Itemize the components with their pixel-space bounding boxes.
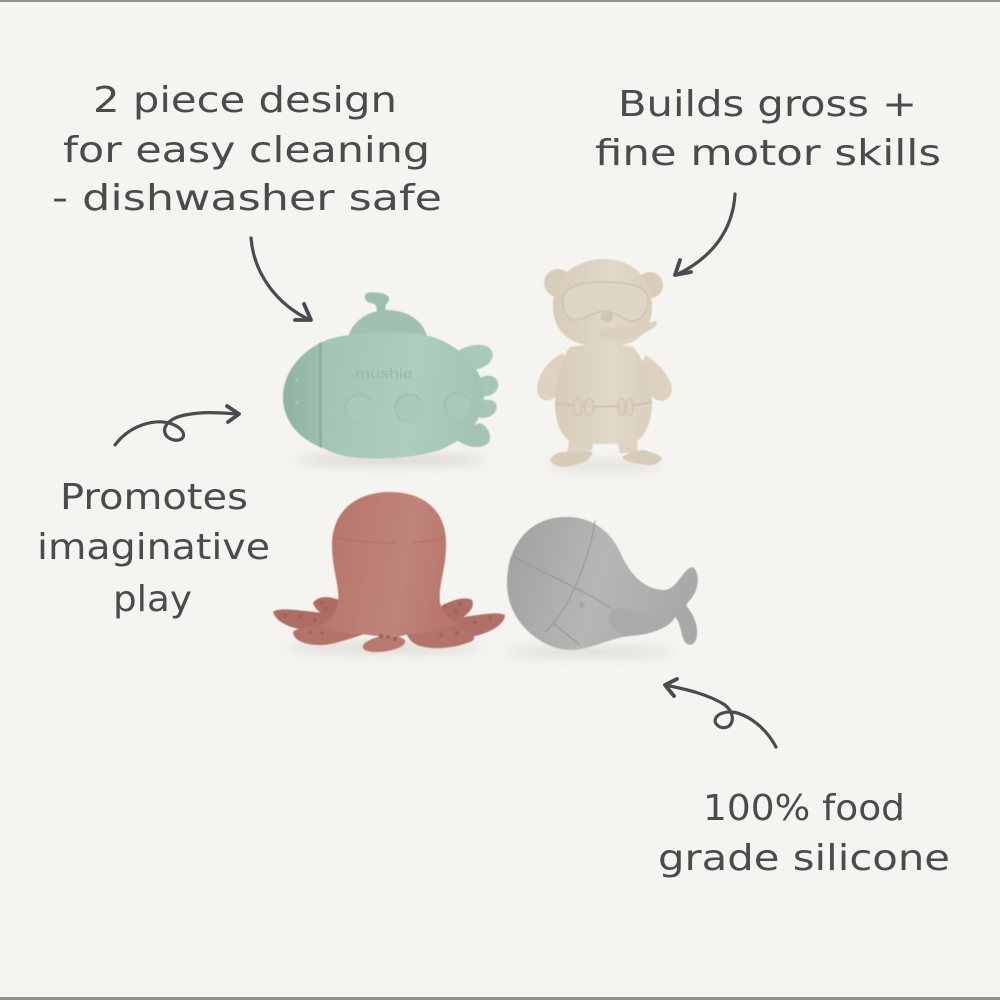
callout: imaginative play: imaginative: [37, 527, 270, 568]
arrow: to submarine: [251, 238, 311, 320]
toy: diver: [537, 259, 672, 470]
callout: imaginative play: play: [113, 579, 192, 620]
callout: food grade silicone: [658, 788, 950, 879]
callout: imaginative play: Promotes: [60, 477, 248, 518]
toy: submarine: [283, 292, 498, 465]
callout: 2 piece design: [52, 80, 442, 219]
callout: 2 piece design: for easy cleaning: [63, 130, 430, 171]
toy: octopus: [273, 492, 505, 652]
callout: 2 piece design: - dishwasher safe: [52, 178, 442, 219]
arrow: to whale: [665, 679, 776, 747]
callout: food grade silicone: 100% food: [703, 788, 905, 829]
arrow: to submarine from left: [115, 406, 239, 445]
callout: food grade silicone: grade silicone: [658, 838, 950, 879]
callout: motor skills: fine motor skills: [595, 133, 941, 174]
callout: imaginative play: [37, 477, 270, 620]
bottom border: [0, 997, 1000, 1000]
arrow: to diver: [675, 194, 735, 275]
callout: motor skills: Builds gross +: [618, 84, 917, 125]
callout: motor skills: [595, 84, 941, 174]
toy: whale: [505, 517, 698, 656]
toy: submarine: mushie: [355, 365, 413, 381]
top border: [0, 0, 1000, 2]
callout: 2 piece design: 2 piece design: [93, 80, 397, 121]
